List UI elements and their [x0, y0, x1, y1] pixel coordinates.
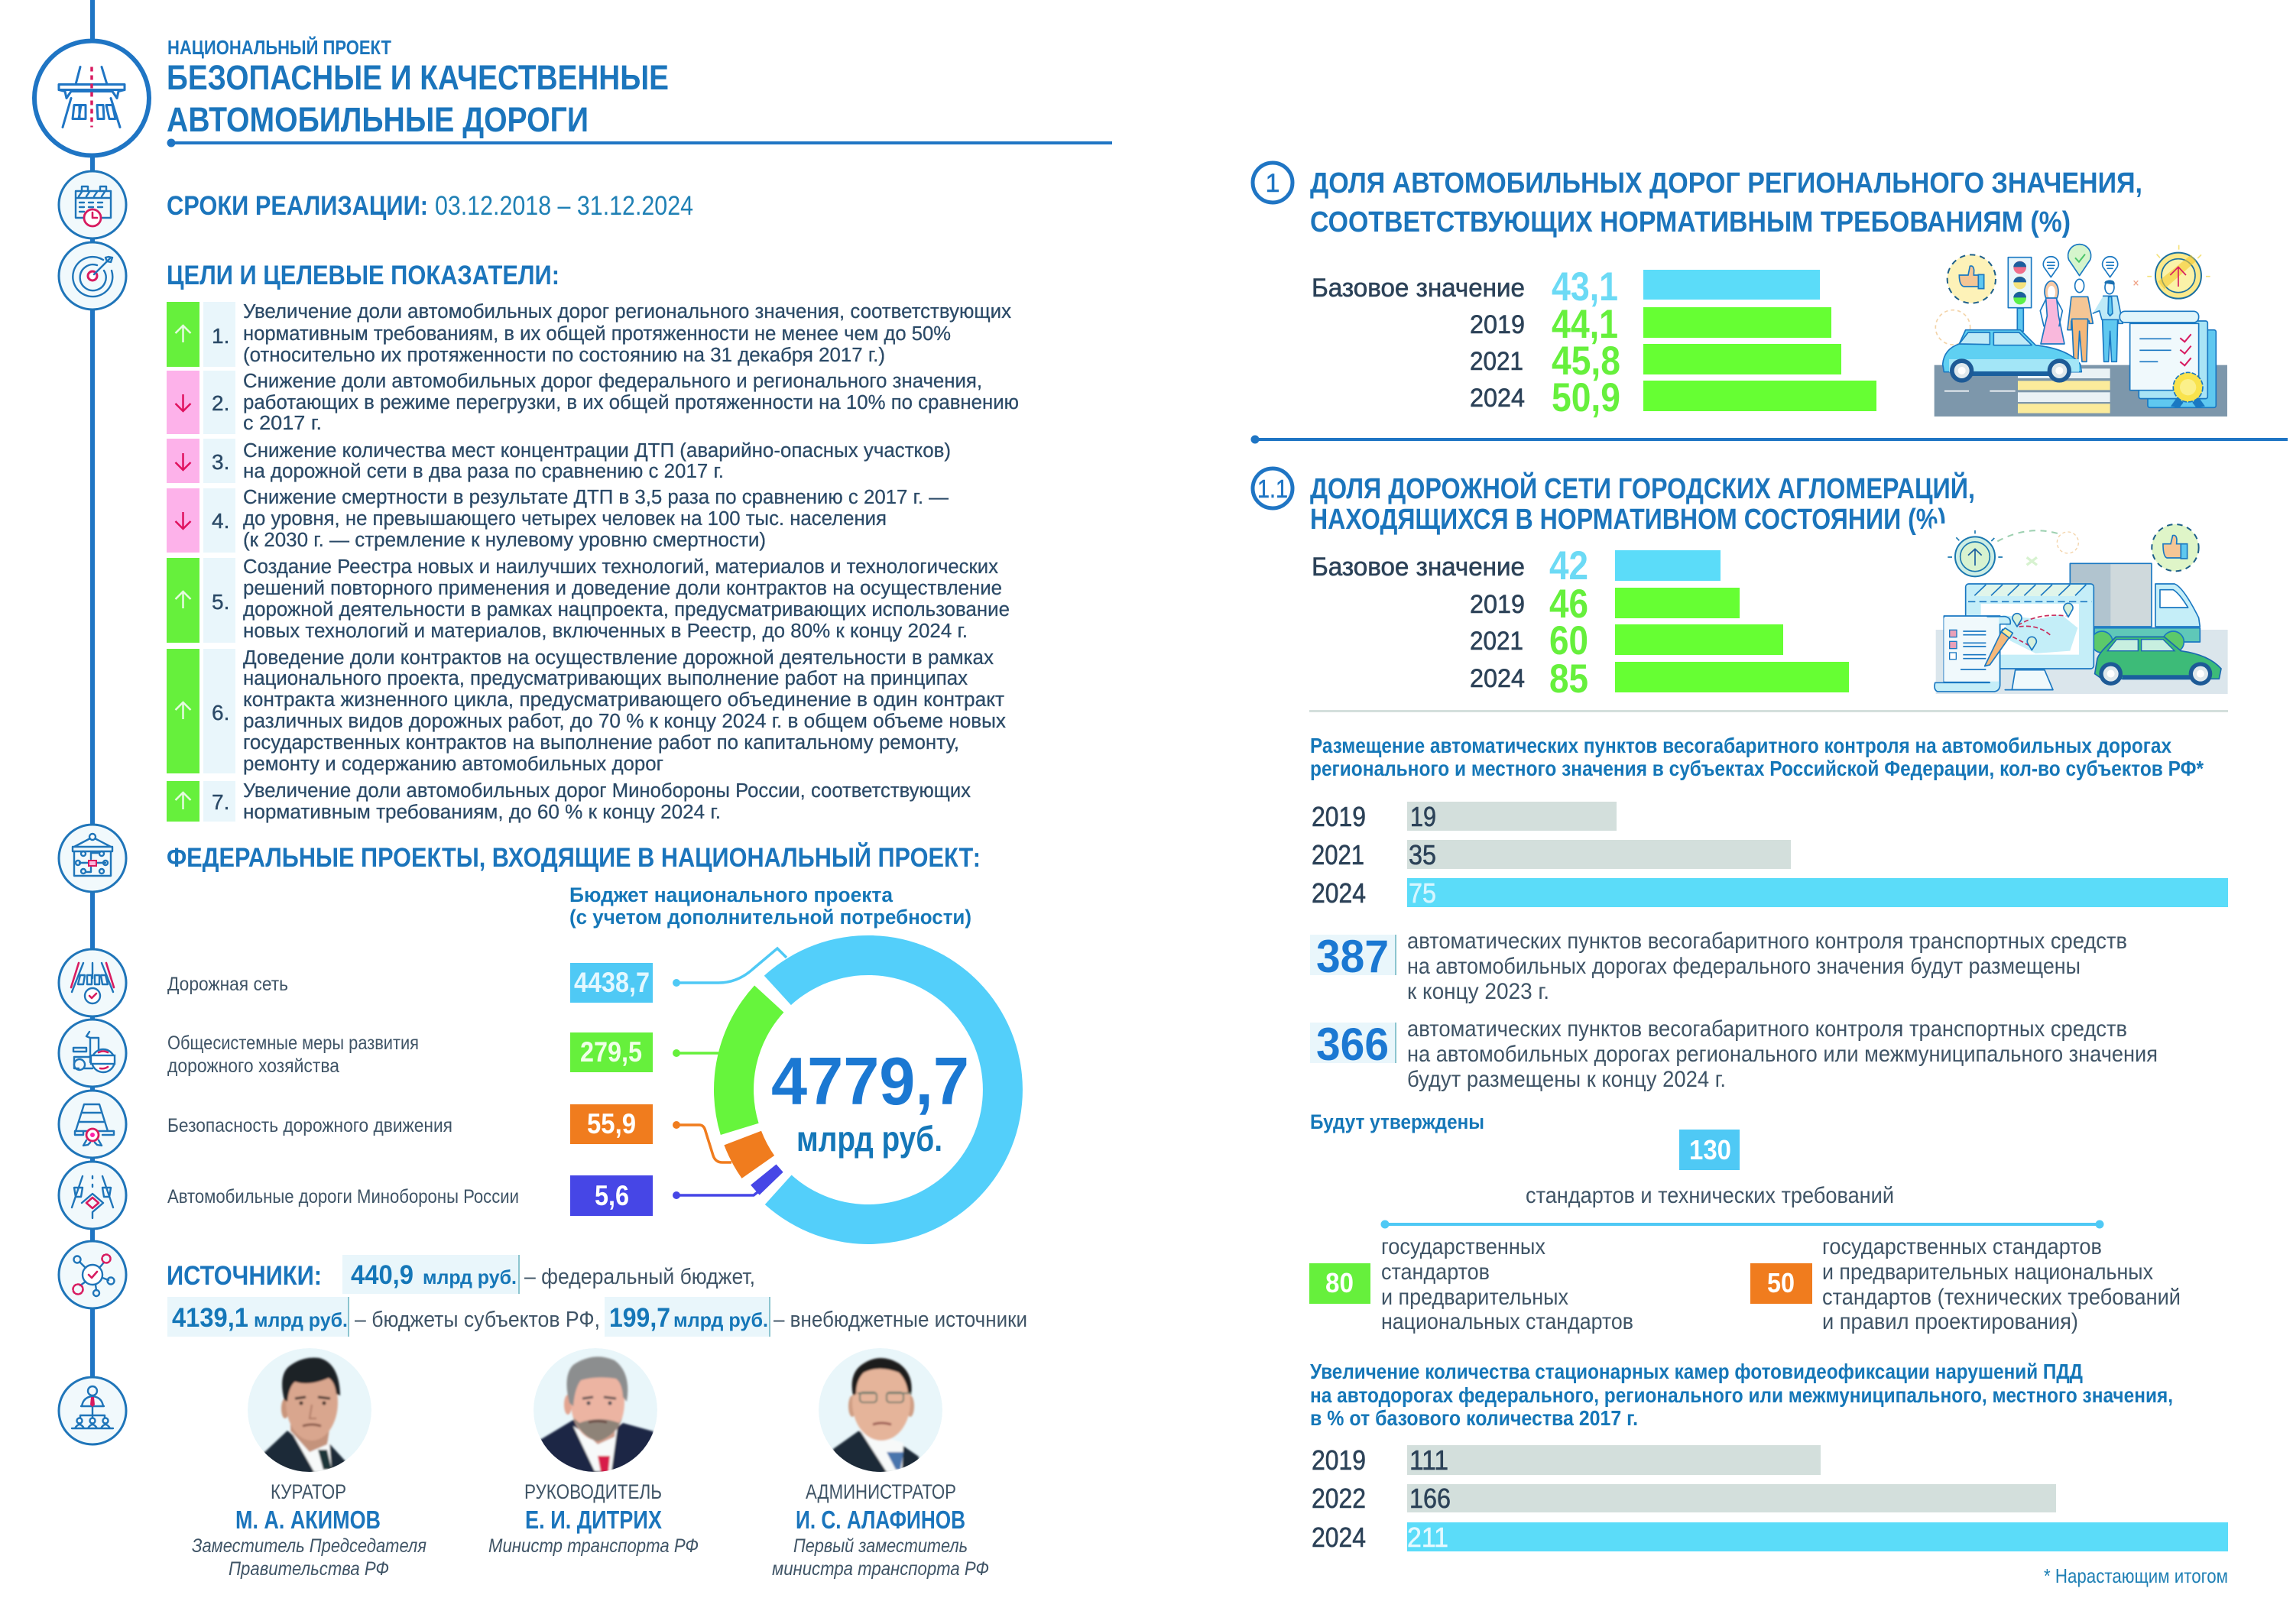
source: regional budgets [167, 1297, 600, 1337]
section 1.1 bar chart: 2019 [1470, 590, 1525, 619]
icon: calendar [59, 171, 126, 238]
donut total: 4779,7 [771, 1043, 969, 1119]
section 1.1 bar chart: Базовое значение [1312, 553, 1525, 582]
label: system measures: дорожного хозяйства [167, 1055, 339, 1077]
footnote: * Нарастающим итогом [2044, 1564, 2228, 1587]
goal 3 [167, 439, 951, 483]
goal 6: Доведение доли контрактов на осуществление дорожной деятельности в рамках [243, 647, 994, 669]
goal 1 [167, 301, 1011, 367]
value box: road network: 4438,7 [574, 967, 650, 998]
goal 5: Создание Реестра новых и наилучших технологий, материалов и технологических [243, 556, 998, 578]
goal 5: новых технологий и материалов, включенных в Реестр, до 80% к концу 2024 г. [243, 621, 968, 642]
value box: road safety [570, 1104, 653, 1144]
source: federal budget: – федеральный бюджет, [524, 1265, 755, 1289]
cameras heading: Увеличение количества стационарных камер фотовидеофиксации нарушений ПДД [1310, 1360, 2083, 1383]
section 1 bar chart: 2021 [1470, 347, 1523, 376]
section 1.1 bar chart: 42 [1549, 543, 1588, 588]
weight control bar chart: 75 [1409, 877, 1436, 909]
goal 2: с 2017 г. [243, 413, 322, 434]
title rule [167, 139, 1112, 147]
goal 4: до уровня, не превышающего четырех человек на 100 тыс. населения [243, 508, 887, 530]
source: regional budgets: 4139,1 [172, 1303, 248, 1333]
head text: Е. И. ДИТРИХ [525, 1506, 662, 1534]
goal 2: Снижение доли автомобильных дорог федерального и регионального значения, [243, 371, 982, 392]
goal 6: контракта жизненного цикла, предусматривающего объединение в один контракт [243, 689, 1004, 711]
goal 6: различных видов дорожных работ, до 70 % к концу 2024 г. в общем объеме новых [243, 711, 1006, 732]
section 1 badge [1253, 163, 1292, 203]
goal 6 [167, 647, 1006, 775]
value box: defense roads: 5,6 [595, 1180, 629, 1211]
section 1.1 bar chart: 60 [1549, 618, 1588, 663]
head text [488, 1480, 699, 1557]
title: АВТОМОБИЛЬНЫЕ ДОРОГИ [167, 100, 589, 139]
administrator text: АДМИНИСТРАТОР [806, 1480, 956, 1503]
administrator text: Первый заместитель [793, 1535, 968, 1557]
standards: 50 [1750, 1234, 2181, 1334]
stat: 387: автоматических пунктов весогабаритного контроля транспортных средств [1407, 929, 2127, 954]
curator text: КУРАТОР [271, 1480, 346, 1503]
goal 6: государственных контрактов на выполнение работ по капитальному ремонту, [243, 732, 959, 754]
source: federal budget [342, 1255, 755, 1294]
section 1 badge: 1 [1266, 169, 1279, 198]
cameras bar chart: 2024 [1312, 1522, 1366, 1553]
goal 7: Увеличение доли автомобильных дорог Минобороны России, соответствующих [243, 780, 971, 802]
budget heading [569, 883, 971, 929]
section 1.1 bar chart [1312, 543, 1849, 702]
cameras heading: в % от базового количества 2017 г. [1310, 1406, 1638, 1430]
section 1 bar chart: 45,8 [1552, 339, 1620, 384]
weight control bar chart: 19 [1410, 801, 1436, 832]
heading: timeline: СРОКИ РЕАЛИЗАЦИИ: [167, 191, 428, 221]
goal 3: на дорожной сети в два раза по сравнению с 2017 г. [243, 461, 724, 482]
portrait: administrator [819, 1348, 942, 1475]
icon: team hierarchy [59, 1377, 126, 1444]
goal 5 [167, 556, 1010, 643]
donut chart: budget [714, 935, 1023, 1244]
goal 2 [167, 371, 1019, 434]
section 1 bar chart: 2024 [1470, 384, 1525, 413]
standards: 50: и правил проектирования) [1822, 1309, 2078, 1334]
goal 1: (относительно их протяженности по состоянию на 31 декабря 2017 г.) [243, 345, 885, 366]
icon: road overpass [34, 41, 149, 156]
connectors [673, 948, 786, 1199]
goal 7: 7. [212, 790, 229, 814]
donut total [771, 1043, 969, 1159]
standards: 80: 80 [1325, 1267, 1354, 1298]
heading: goals: ЦЕЛИ И ЦЕЛЕВЫЕ ПОКАЗАТЕЛИ: [167, 261, 559, 290]
label: road network: Дорожная сеть [167, 974, 288, 995]
heading: timeline: 03.12.2018 – 31.12.2024 [435, 191, 693, 221]
source: off-budget: млрд руб. [673, 1308, 768, 1331]
cameras bar chart: 211 [1407, 1522, 1448, 1553]
stat: 366: будут размещены к концу 2024 г. [1407, 1067, 1726, 1092]
administrator text [772, 1480, 989, 1580]
illustration: car, people and documents [1935, 245, 2227, 417]
section 1.1 bar chart: 2024 [1470, 664, 1525, 693]
head text: РУКОВОДИТЕЛЬ [524, 1480, 662, 1503]
value box: system measures: 279,5 [580, 1036, 642, 1068]
standards: 80: государственных [1381, 1234, 1545, 1259]
budget heading: Бюджет национального проекта [569, 883, 894, 906]
title [167, 58, 669, 139]
stat: 366: на автомобильных дорогах регионального или межмуниципального значения [1407, 1042, 2158, 1067]
section 1.1 badge: 1.1 [1257, 475, 1288, 503]
goal 4: 4. [212, 509, 229, 533]
stat: 387 [1310, 929, 2127, 1004]
portrait: curator [248, 1348, 371, 1475]
source: federal budget: 440,9 [351, 1260, 414, 1290]
standards: 80: и предварительных [1381, 1285, 1568, 1310]
goal 6: ремонту и содержанию автомобильных дорог [243, 754, 663, 775]
curator text: Правительства РФ [229, 1558, 389, 1580]
value box: road network [570, 963, 653, 1003]
donut total: млрд руб. [796, 1119, 942, 1159]
section 1 bar chart [1312, 264, 1876, 420]
goal 4 [167, 487, 949, 553]
timeline spine [90, 0, 95, 1379]
divider [1250, 436, 2288, 443]
source: federal budget: млрд руб. [423, 1266, 517, 1289]
goal 3: 3. [212, 450, 229, 474]
section 1 heading [1310, 167, 2142, 238]
value box: 130 [1679, 1130, 1740, 1170]
illustration: truck, monitor and car [1935, 524, 2228, 694]
value box: 130: 130 [1689, 1134, 1731, 1165]
goal 5: 5. [212, 590, 229, 614]
curator text: М. А. АКИМОВ [235, 1506, 381, 1534]
title: БЕЗОПАСНЫЕ И КАЧЕСТВЕННЫЕ [167, 58, 669, 97]
section 1 bar chart: 43,1 [1552, 264, 1618, 310]
goal 7: нормативным требованиям, до 60 % к концу 2024 г. [243, 802, 721, 823]
section 1.1 heading: НАХОДЯЩИХСЯ В НОРМАТИВНОМ СОСТОЯНИИ (%) [1310, 504, 1946, 536]
value box: system measures [570, 1032, 653, 1072]
source: off-budget: 199,7 [609, 1303, 670, 1333]
icon: road check [59, 949, 126, 1016]
heading: sources: ИСТОЧНИКИ: [167, 1261, 322, 1291]
goal 2: работающих в режиме перегрузки, в их общей протяженности на 10% по сравнению [243, 392, 1019, 413]
goal 6: 6. [212, 701, 229, 724]
source: regional budgets: млрд руб. [254, 1308, 348, 1331]
section 1.1 heading [1310, 471, 1975, 536]
heading: to be approved: Будут утверждены [1310, 1110, 1484, 1133]
value box: road safety: 55,9 [587, 1108, 636, 1139]
label: system measures [167, 1032, 419, 1077]
section 1 bar chart: 2019 [1470, 310, 1525, 339]
section 1 bar chart: 44,1 [1552, 302, 1618, 347]
goal 6: национального проекта, предусматривающих выполнение работ на принципах [243, 668, 968, 689]
curator text [192, 1480, 426, 1580]
weight control bar chart: 2024 [1312, 877, 1366, 909]
icon: network [59, 1241, 126, 1308]
budget heading: (с учетом дополнительной потребности) [569, 906, 971, 929]
goal 3: Снижение количества мест концентрации ДТП (аварийно-опасных участков) [243, 440, 951, 462]
icon: target [59, 242, 126, 310]
section 1.1 bar chart: 2021 [1470, 627, 1523, 656]
source: regional budgets: – бюджеты субъектов РФ, [355, 1308, 600, 1332]
heading: timeline [167, 191, 693, 221]
goal 5: решений повторного применения и доведение доли контрактов на осуществление [243, 578, 1002, 599]
goal 5: дорожной деятельности в рамках нацпроекта, предусматривающих использование [243, 599, 1010, 621]
weight control bar chart [1312, 801, 2228, 909]
goal 4: (к 2030 г. — стремление к нулевому уровню смертности) [243, 530, 766, 551]
weight control heading: Размещение автоматических пунктов весогабаритного контроля на автомобильных дорогах [1310, 734, 2171, 757]
source: off-budget [605, 1297, 1027, 1337]
standards: 50: стандартов (технических требований [1822, 1285, 2181, 1310]
standards caption: стандартов и технических требований [1526, 1183, 1894, 1208]
stat: 366: 366 [1316, 1019, 1389, 1070]
goal 2: 2. [212, 391, 229, 415]
standards: 50: 50 [1767, 1267, 1795, 1298]
weight control bar chart: 2019 [1312, 801, 1366, 832]
label: defense ministry roads: Автомобильные дороги Минобороны России [167, 1186, 519, 1207]
icon: road with diamond [59, 1162, 126, 1229]
goal 1: нормативным требованиям, в их общей протяженности не менее чем до 50% [243, 323, 951, 345]
bracket line [1380, 1220, 2103, 1229]
section 1 heading: ДОЛЯ АВТОМОБИЛЬНЫХ ДОРОГ РЕГИОНАЛЬНОГО ЗНАЧЕНИЯ, [1310, 167, 2142, 199]
value box: defense roads [570, 1175, 653, 1216]
stat: 366 [1310, 1016, 2158, 1092]
portrait: head [534, 1348, 657, 1475]
weight control bar chart: 2021 [1312, 839, 1364, 870]
section rule [1309, 710, 2228, 712]
source: off-budget: – внебюджетные источники [774, 1308, 1027, 1332]
cameras bar chart [1312, 1444, 2228, 1553]
heading: federal projects: ФЕДЕРАЛЬНЫЕ ПРОЕКТЫ, ВХОДЯЩИЕ В НАЦИОНАЛЬНЫЙ ПРОЕКТ: [167, 842, 981, 873]
stat: 387: на автомобильных дорогах федерального значения будут размещены [1407, 954, 2081, 979]
administrator text: И. С. АЛАФИНОВ [796, 1506, 965, 1534]
standards: 80: стандартов [1381, 1259, 1490, 1285]
goal 4: Снижение смертности в результате ДТП в 3,5 раза по сравнению с 2017 г. — [243, 487, 949, 508]
goal 7 [167, 780, 971, 823]
cameras heading [1310, 1360, 2173, 1430]
standards: 80 [1309, 1234, 1633, 1334]
stat: 366: автоматических пунктов весогабаритного контроля транспортных средств [1407, 1016, 2127, 1042]
cameras bar chart: 2019 [1312, 1444, 1366, 1476]
section 1.1 bar chart: 46 [1549, 582, 1588, 627]
section 1.1 badge [1253, 468, 1292, 508]
cameras bar chart: 166 [1409, 1483, 1451, 1514]
stat: 387: 387 [1316, 931, 1389, 982]
icon: project board [59, 825, 126, 892]
section 1.1 bar chart: 85 [1549, 656, 1588, 702]
cameras bar chart: 2022 [1312, 1483, 1366, 1514]
label: system measures: Общесистемные меры развития [167, 1032, 419, 1054]
goal 1: Увеличение доли автомобильных дорог регионального значения, соответствующих [243, 301, 1011, 323]
label: road safety: Безопасность дорожного движения [167, 1115, 452, 1136]
goals list [167, 301, 1019, 823]
section 1 bar chart: 50,9 [1552, 375, 1620, 420]
weight control bar chart: 35 [1409, 839, 1436, 870]
stat: 387: к концу 2023 г. [1407, 979, 1549, 1004]
icon: road roller [59, 1019, 126, 1087]
head text: Министр транспорта РФ [488, 1535, 699, 1557]
cameras bar chart: 111 [1409, 1444, 1448, 1476]
goal 1: 1. [212, 324, 229, 348]
project label: НАЦИОНАЛЬНЫЙ ПРОЕКТ [167, 36, 391, 59]
standards: 50: и предварительных национальных [1822, 1259, 2153, 1285]
weight control heading [1310, 734, 2204, 780]
cameras heading: на автодорогах федерального, регионального или межмуниципального, местного значения, [1310, 1383, 2173, 1407]
standards: 50: государственных стандартов [1822, 1234, 2102, 1259]
administrator text: министра транспорта РФ [772, 1558, 989, 1580]
section 1 bar chart: Базовое значение [1312, 274, 1525, 303]
section 1.1 heading: ДОЛЯ ДОРОЖНОЙ СЕТИ ГОРОДСКИХ АГЛОМЕРАЦИЙ, [1310, 471, 1975, 505]
curator text: Заместитель Председателя [192, 1535, 426, 1557]
section 1 heading: СООТВЕТСТВУЮЩИХ НОРМАТИВНЫМ ТРЕБОВАНИЯМ (%) [1310, 206, 2071, 238]
icon: safety cone [59, 1091, 126, 1158]
standards: 80: национальных стандартов [1381, 1309, 1633, 1334]
